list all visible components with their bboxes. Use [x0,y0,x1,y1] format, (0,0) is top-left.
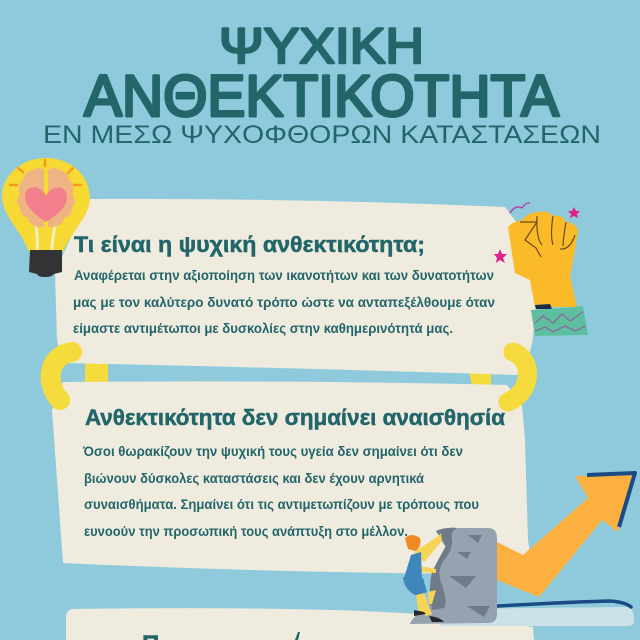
panel: what is resilience [55,199,536,375]
wristband [531,306,588,336]
title: ΑΝΘΕΚΤΙΚΟΤΗΤΑ [84,64,559,129]
stars [494,207,580,263]
chart arrow: rising orange arrow [497,473,635,597]
subtitle: ΕΝ ΜΕΣΩ ΨΥΧΟΦΘΟΡΩΝ ΚΑΤΑΣΤΑΣΕΩΝ [43,121,601,149]
icon: climbing rock [410,528,497,624]
light rays [10,160,81,185]
text block: explanation [82,444,479,539]
text block: definition: είμαστε αντιμέτωποι με δυσκολίες στην καθημερινότητά μας. [73,321,453,336]
icon: climber figure [403,533,444,622]
title: ΨΥΧΙΚΗ [219,18,424,74]
icon: yellow hook right [508,352,527,402]
panel: third section, cut off at bottom [66,608,534,640]
heading: resilience is not insensitivity: Ανθεκτικότητα δεν σημαίνει αναισθησία [85,405,505,430]
heart [25,187,67,222]
icon: accent of cut off heading [295,632,300,640]
heading: what is resilience: Τι είναι η ψυχική ανθεκτικότητα; [74,232,425,257]
text block: explanation: βιώνουν δύσκολες καταστάσεις και δεν έχουν αρνητικά [84,471,425,486]
icon: yellow hook left [51,352,72,400]
brain [17,168,75,227]
title [84,18,559,129]
text block: definition: Αναφέρεται στην αξιοποίηση των ικανοτήτων και των δυνατοτήτων [74,268,494,283]
text block: explanation: Όσοι θωρακίζουν την ψυχική τους υγεία δεν σημαίνει ότι δεν [82,444,463,459]
text block: definition [73,268,495,336]
icon: raised fist [494,203,588,336]
panel: resilience is not insensitivity [52,381,533,574]
platform under the arrow [440,601,634,626]
bulb base [29,250,62,277]
text block: definition: μας με τον καλύτερο δυνατό τρόπο ώστε να ανταπεξέλθουμε όταν [73,295,495,310]
text block: explanation: ευνοούν την προσωπική τους ανάπτυξη στο μέλλον. [84,524,408,539]
icon: small yellow hooks behind panels [85,362,491,386]
text block: explanation: συναισθήματα. Σημαίνει ότι τις αντιμετωπίζουν με τρόπους που [84,497,479,512]
icon: light bulb with brain and heart [2,158,90,277]
